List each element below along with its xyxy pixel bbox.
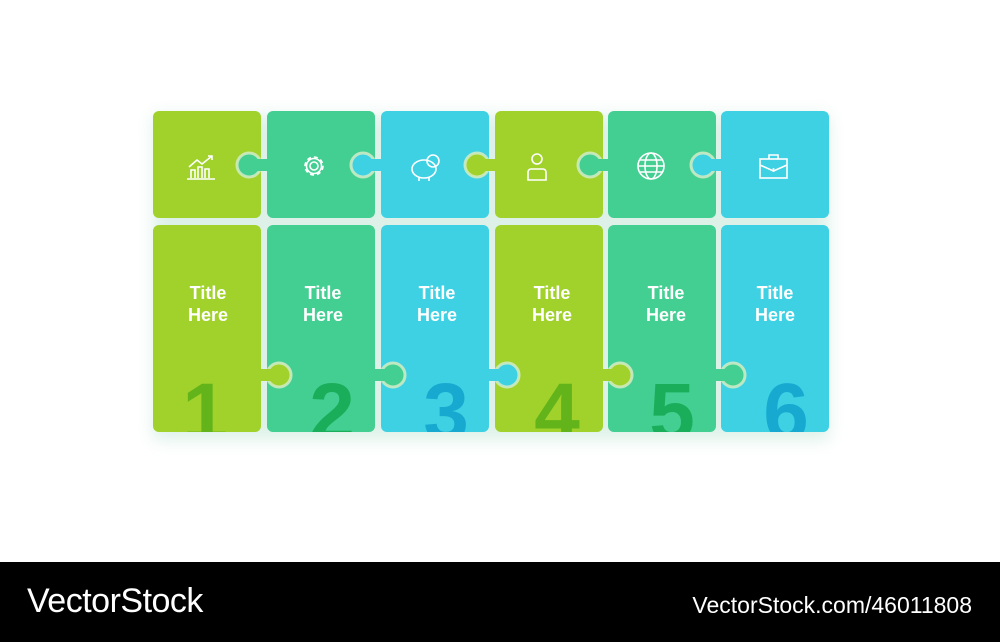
column 6 — [721, 111, 829, 458]
icon: globe — [638, 153, 664, 179]
column 5 — [608, 111, 716, 458]
number 3: 3 — [423, 367, 469, 458]
icon: piggy bank — [412, 155, 439, 181]
footer — [0, 562, 1000, 642]
icon: briefcase — [760, 155, 787, 178]
footer logo: VectorStock — [27, 582, 203, 620]
icon: person — [528, 154, 546, 180]
column 6: Here — [755, 305, 795, 325]
glow — [153, 115, 829, 440]
number 5: 5 — [649, 367, 695, 458]
number 4: 4 — [534, 367, 580, 458]
footer url: VectorStock.com/46011808 — [692, 592, 972, 618]
column 1: Here — [188, 305, 228, 325]
puzzle knobs — [237, 153, 745, 387]
column 3 — [381, 111, 489, 458]
number 2: 2 — [309, 367, 355, 458]
title 4: Title — [534, 283, 570, 303]
number 6: 6 — [763, 367, 809, 458]
column 4 — [495, 111, 603, 458]
title 6: Title — [757, 283, 793, 303]
icon: gear — [305, 157, 323, 175]
number 1: 1 — [182, 367, 228, 458]
title 2: Title — [305, 283, 341, 303]
icon: chart — [187, 156, 215, 179]
title 1: Title — [190, 283, 226, 303]
column 4: Here — [532, 305, 572, 325]
title 5: Title — [648, 283, 684, 303]
column 1 — [153, 111, 261, 458]
puzzle infographic — [148, 110, 834, 446]
column 3: Here — [417, 305, 457, 325]
column 2 — [267, 111, 375, 458]
column 5: Here — [646, 305, 686, 325]
title 3: Title — [419, 283, 455, 303]
column 2: Here — [303, 305, 343, 325]
